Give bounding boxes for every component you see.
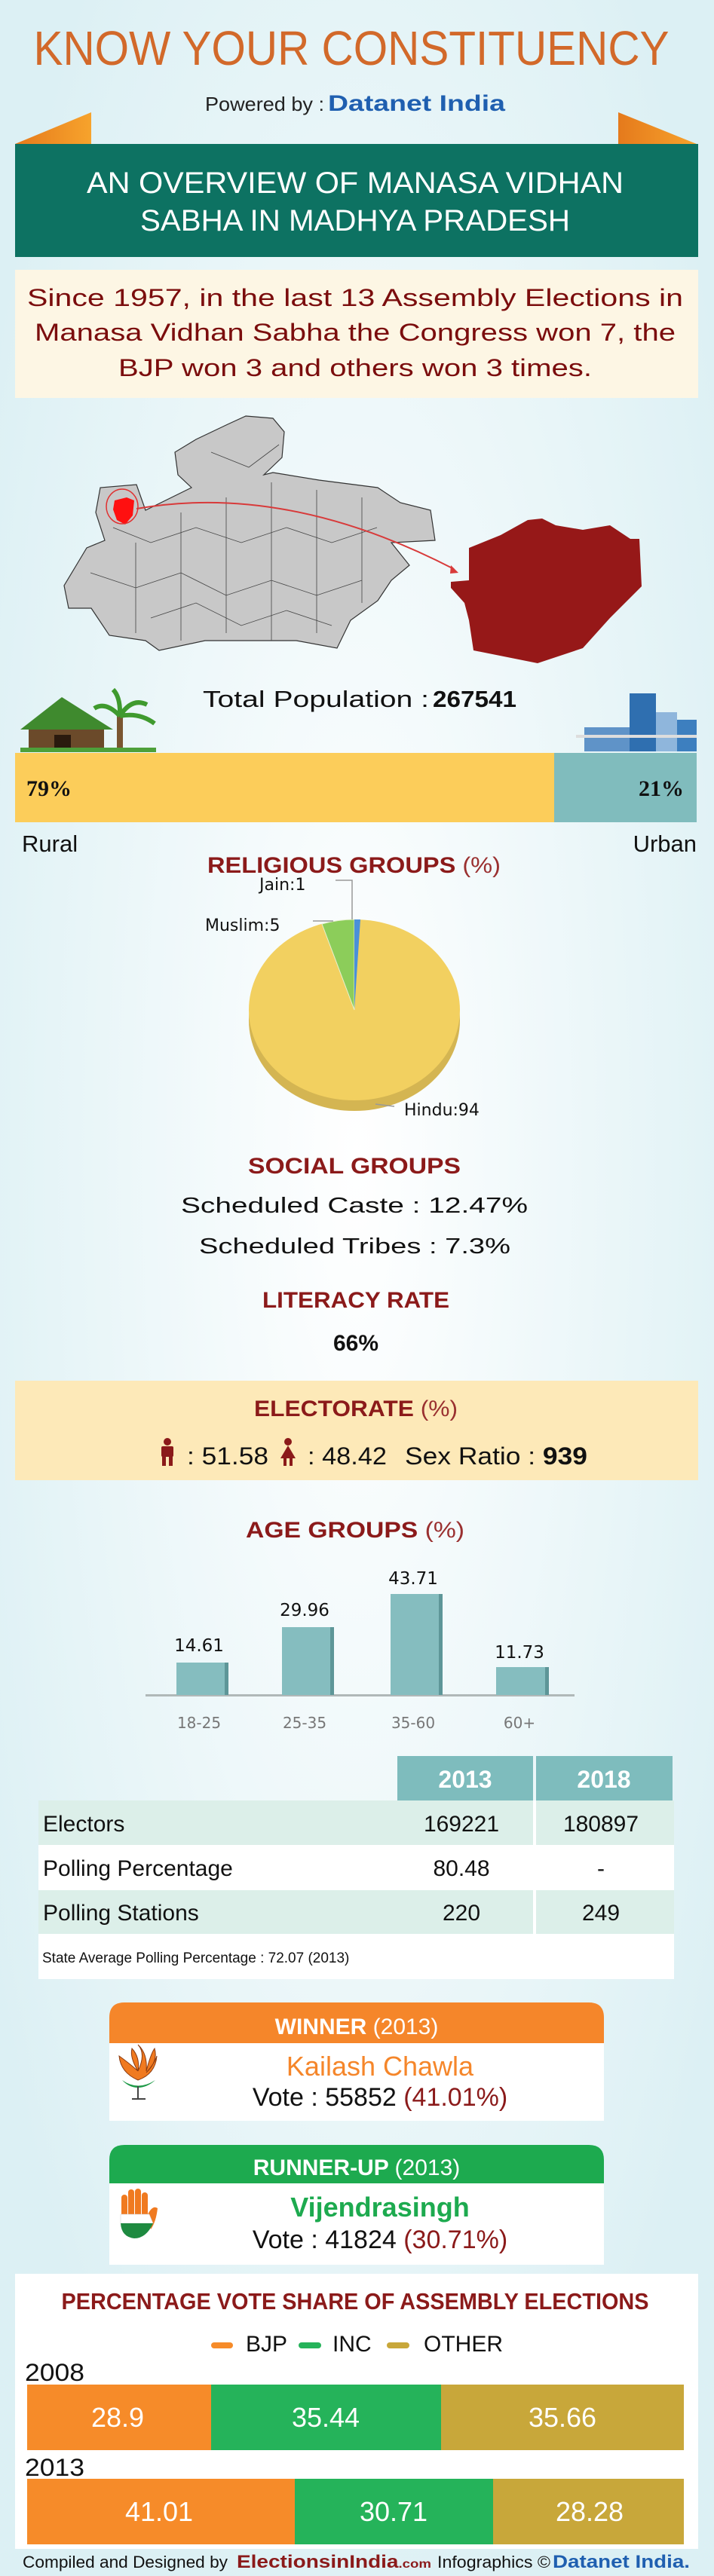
- table: electors and polling: [38, 1756, 674, 1979]
- legend: OTHER: [424, 2332, 503, 2357]
- bar chart: age groups: 14.61: [174, 1636, 224, 1656]
- pie chart: religious groups: [205, 876, 480, 1120]
- bar: rural vs urban: Urban: [633, 831, 697, 857]
- heading: literacy rate: LITERACY RATE: [262, 1288, 449, 1313]
- bar chart: age groups: 11.73: [495, 1643, 544, 1663]
- panel: electorate: [15, 1381, 698, 1480]
- panel: runner-up: [109, 2145, 604, 2265]
- bar chart: age groups: 29.96: [280, 1601, 329, 1620]
- icon: hand: [121, 2189, 158, 2238]
- social groups values: Scheduled Tribes : 7.3%: [199, 1234, 510, 1259]
- powered by: Powered by :: [205, 93, 324, 115]
- highlighted constituency: [113, 497, 134, 525]
- ribbon corners: [15, 112, 697, 144]
- banner: overview heading: [15, 144, 698, 257]
- powered by: [205, 91, 505, 116]
- panel: vote share chart: 2008: [25, 2359, 84, 2386]
- panel: vote share chart: 41.01: [125, 2496, 193, 2527]
- bar chart: age groups: 35-60: [391, 1714, 435, 1732]
- panel: vote share chart: PERCENTAGE VOTE SHARE OF ASSEMBLY ELECTIONS: [62, 2288, 648, 2314]
- heading: age groups: AGE GROUPS (%): [246, 1518, 464, 1543]
- panel: electorate: : 51.58: [187, 1442, 268, 1470]
- bar: rural vs urban: Rural: [22, 831, 78, 857]
- bar chart: age groups: 60+: [504, 1714, 535, 1732]
- social groups values: Scheduled Caste : 12.47%: [181, 1194, 528, 1218]
- bar: rural vs urban: 21%: [639, 776, 684, 801]
- legend: BJP: [246, 2332, 287, 2357]
- heading: social groups: SOCIAL GROUPS: [248, 1154, 461, 1179]
- total population: Total Population :: [203, 686, 429, 712]
- panel: vote share chart: 28.9: [91, 2402, 144, 2433]
- summary text box: Manasa Vidhan Sabha the Congress won 7, the: [35, 319, 676, 346]
- banner: overview heading: SABHA IN MADHYA PRADESH: [140, 204, 570, 237]
- heading: religious groups: RELIGIOUS GROUPS (%): [207, 853, 501, 878]
- footer credits: Datanet India.: [553, 2552, 690, 2572]
- summary text box: Since 1957, in the last 13 Assembly Elections in: [27, 284, 683, 311]
- summary text box: [15, 270, 698, 398]
- table: electors and polling: 220: [443, 1901, 480, 1926]
- table: electors and polling: 80.48: [433, 1856, 490, 1881]
- panel: vote share chart: 30.71: [360, 2496, 427, 2527]
- footer credits: [23, 2552, 690, 2572]
- table: electors and polling: Polling Stations: [43, 1901, 199, 1926]
- icon: urban buildings: [576, 693, 697, 751]
- powered by: Datanet India: [328, 91, 505, 116]
- pie chart: religious groups: Jain:1: [258, 876, 305, 895]
- panel: winner: [109, 2002, 604, 2121]
- table: electors and polling: State Average Polling Percentage : 72.07 (2013): [42, 1950, 349, 1966]
- pie chart: religious groups: Muslim:5: [205, 916, 280, 935]
- panel: winner: WINNER (2013): [275, 2015, 438, 2039]
- table: electors and polling: 180897: [563, 1812, 639, 1837]
- footer credits: Infographics ©: [437, 2553, 550, 2571]
- bar chart: age groups: [146, 1569, 575, 1732]
- bar chart: age groups: 25-35: [283, 1714, 326, 1732]
- footer credits: ElectionsinIndia .com: [237, 2552, 431, 2572]
- table: electors and polling: 2018: [577, 1766, 631, 1793]
- icon: rural hut: [20, 690, 156, 752]
- bar chart: age groups: 18-25: [177, 1714, 221, 1732]
- social groups values: [181, 1194, 528, 1259]
- panel: vote share chart: 35.66: [529, 2402, 596, 2433]
- legend: INC: [332, 2332, 372, 2357]
- table: electors and polling: Electors: [43, 1812, 124, 1837]
- total population: 267541: [433, 686, 516, 712]
- table: electors and polling: 249: [582, 1901, 620, 1926]
- bar: rural vs urban: 79%: [26, 776, 72, 801]
- panel: electorate: Sex Ratio : 939: [405, 1442, 587, 1470]
- literacy value: 66%: [333, 1331, 378, 1356]
- bar chart: age groups: 43.71: [388, 1569, 438, 1589]
- footer credits: Compiled and Designed by: [23, 2553, 228, 2571]
- total population: [203, 686, 516, 712]
- pie chart: religious groups: Hindu:94: [404, 1101, 480, 1120]
- icon: lotus: [119, 2045, 157, 2100]
- icon: female: [280, 1438, 296, 1466]
- banner: overview heading: AN OVERVIEW OF MANASA VIDHAN: [87, 167, 624, 200]
- panel: runner-up: RUNNER-UP (2013): [253, 2155, 460, 2180]
- panel: winner: Kailash Chawla: [287, 2051, 474, 2082]
- panel: runner-up: Vijendrasingh: [290, 2192, 470, 2223]
- table: electors and polling: -: [597, 1856, 605, 1881]
- arrow: [136, 503, 454, 569]
- icon: male: [161, 1438, 173, 1466]
- panel: vote share chart: 35.44: [292, 2402, 360, 2433]
- panel: vote share chart: 2013: [25, 2454, 84, 2481]
- table: electors and polling: Polling Percentage: [43, 1856, 233, 1881]
- summary text box: BJP won 3 and others won 3 times.: [118, 354, 592, 381]
- panel: vote share chart: [15, 2274, 698, 2549]
- panel: electorate: : 48.42: [308, 1442, 387, 1470]
- panel: electorate: ELECTORATE (%): [254, 1397, 458, 1421]
- panel: vote share chart: 28.28: [556, 2496, 624, 2527]
- bar: rural vs urban: [15, 753, 697, 857]
- legend: [211, 2332, 503, 2357]
- panel: winner: Vote : 55852 (41.01%): [253, 2083, 507, 2112]
- map: Madhya Pradesh with highlighted constituency: [64, 416, 642, 663]
- panel: runner-up: Vote : 41824 (30.71%): [253, 2226, 507, 2254]
- title: KNOW YOUR CONSTITUENCY: [33, 21, 670, 75]
- zoomed constituency: [451, 519, 642, 663]
- table: electors and polling: 2013: [438, 1766, 492, 1793]
- table: electors and polling: 169221: [424, 1812, 499, 1837]
